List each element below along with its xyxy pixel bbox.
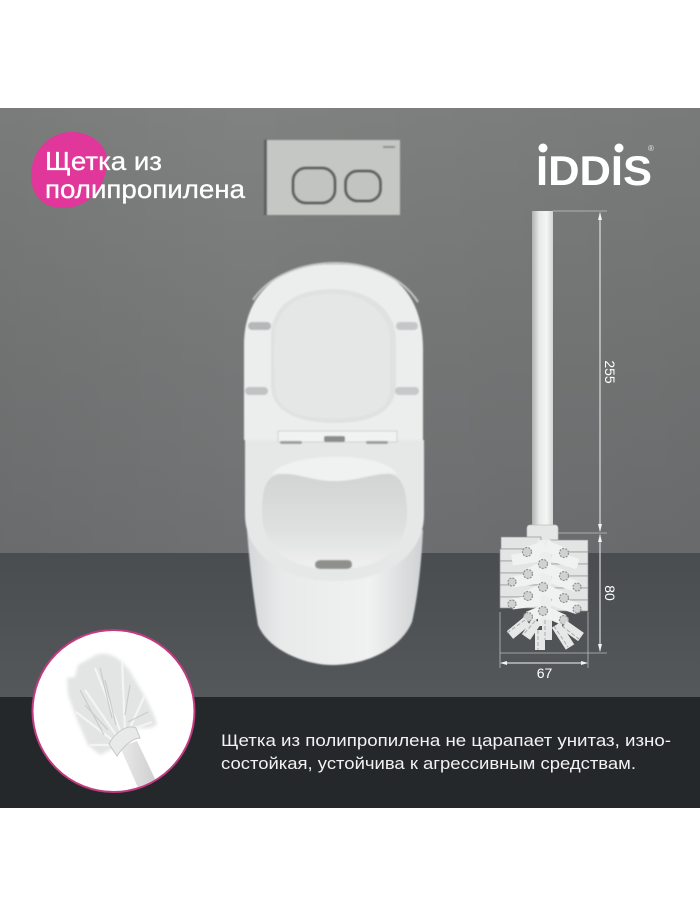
background: floor bbox=[0, 553, 700, 697]
brush illustration bbox=[500, 211, 588, 650]
sump shadow bbox=[315, 560, 352, 569]
bowl opening bbox=[262, 474, 407, 569]
seat inner ring bbox=[271, 289, 396, 423]
seat lid bbox=[244, 264, 423, 440]
caption: состойкая, устойчива к агрессивным средствам. bbox=[221, 754, 636, 773]
brush stem bbox=[532, 211, 553, 526]
bowl rim band bbox=[245, 440, 424, 581]
dimension label: 80: 80 bbox=[602, 585, 618, 601]
logo: IDDIS bbox=[536, 147, 652, 194]
bumper pads bbox=[248, 322, 271, 330]
close-up handle bbox=[122, 741, 155, 787]
heading: Щетка из bbox=[45, 146, 162, 176]
close-up bristle head bbox=[67, 654, 157, 755]
plate brand mark bbox=[383, 146, 395, 148]
flush button: large bbox=[293, 168, 335, 203]
logo: ® bbox=[648, 144, 654, 153]
rosette ends bbox=[508, 548, 581, 624]
back bristles bbox=[500, 537, 588, 611]
toilet bowl body bbox=[247, 530, 423, 665]
front tufts bbox=[512, 546, 578, 620]
hinge bar bbox=[278, 431, 397, 442]
toilet bbox=[244, 263, 424, 665]
heading bbox=[45, 146, 246, 204]
close-up collar bbox=[109, 727, 140, 756]
spine bbox=[538, 540, 551, 626]
lid inner panel bbox=[274, 294, 390, 418]
heading: полипропилена bbox=[45, 174, 246, 204]
caption: Щетка из полипропилена не царапает унитаз, изно- bbox=[221, 731, 671, 750]
caption bbox=[221, 731, 671, 773]
background: wall bbox=[0, 108, 700, 554]
splayed bottom tufts bbox=[507, 620, 581, 650]
pink blob bbox=[31, 132, 107, 208]
dimension label: 67: 67 bbox=[537, 665, 552, 681]
brush collar bbox=[527, 525, 558, 545]
dimension lines bbox=[500, 211, 607, 668]
dimension label: 255: 255 bbox=[602, 360, 618, 384]
background: dark caption band bbox=[0, 697, 700, 808]
flush plate bbox=[264, 139, 400, 215]
flush button: small bbox=[346, 171, 380, 201]
inset circle: brush close-up bbox=[32, 630, 194, 792]
rim overhang bbox=[272, 457, 397, 481]
